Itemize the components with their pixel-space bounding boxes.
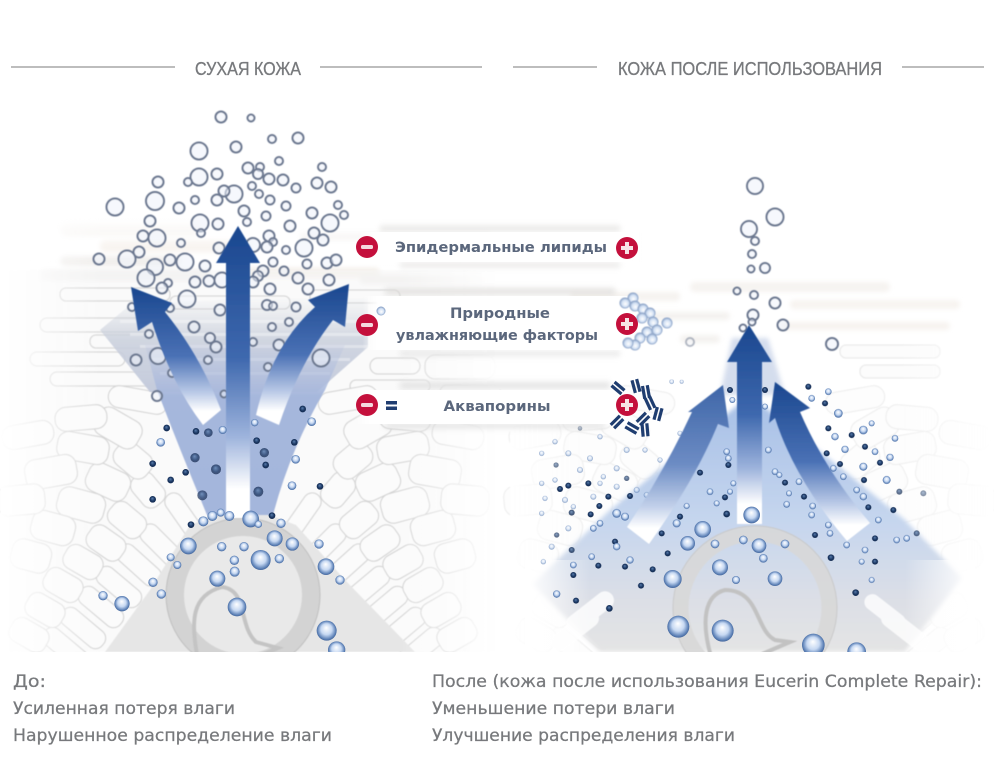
label: aquaporins: Аквапорины bbox=[444, 399, 550, 415]
caption: before: До: bbox=[13, 672, 46, 692]
follicle: dry skin bbox=[166, 518, 320, 672]
icon: bubble cluster bbox=[620, 292, 672, 350]
caption: before: Нарушенное распределение влаги bbox=[13, 726, 332, 746]
caption: before bbox=[13, 672, 332, 746]
icon: single bubble bbox=[376, 306, 386, 316]
icon: aquaporin cluster bbox=[610, 379, 664, 437]
rising bubbles: after use bbox=[686, 178, 838, 350]
blue fan bbox=[532, 395, 962, 652]
funnel: dry skin bbox=[145, 345, 345, 515]
caption: after: Улучшение распределения влаги bbox=[432, 726, 735, 746]
heading: dry skin: СУХАЯ КОЖА bbox=[195, 59, 301, 79]
label: epidermal lipids bbox=[356, 232, 642, 262]
white cell ends bbox=[547, 588, 933, 654]
caption: after: После (кожа после использования Eucerin Complete Repair): bbox=[432, 672, 982, 692]
label band shadows bbox=[380, 226, 620, 428]
arrows: after use bbox=[627, 325, 870, 544]
plus badge bbox=[616, 237, 638, 259]
caption: after: Уменьшение потери влаги bbox=[432, 699, 675, 719]
scattered moisture: after use bbox=[539, 379, 926, 612]
arrows: dry skin bbox=[131, 226, 349, 518]
follicle: after use bbox=[673, 526, 837, 690]
skin background: after use bbox=[503, 282, 994, 672]
plus badge bbox=[616, 313, 638, 335]
minus badge bbox=[356, 236, 378, 258]
label: natural moisturizing factors: увлажняющие факторы bbox=[396, 328, 598, 344]
large droplets: after use bbox=[664, 387, 866, 661]
skin background: dry skin bbox=[0, 200, 500, 672]
label: epidermal lipids: Эпидермальные липиды bbox=[395, 240, 607, 256]
label: aquaporins bbox=[355, 379, 664, 437]
caption: after bbox=[432, 672, 982, 746]
label: natural moisturizing factors: Природные bbox=[450, 306, 550, 322]
bubbles escaping: dry skin bbox=[94, 112, 348, 401]
heading: skin after use: КОЖА ПОСЛЕ ИСПОЛЬЗОВАНИЯ bbox=[618, 59, 882, 79]
grey band bbox=[100, 298, 368, 392]
caption: before: Усиленная потеря влаги bbox=[13, 699, 235, 719]
arrow halo bbox=[720, 338, 785, 395]
minus badge bbox=[356, 314, 378, 336]
icon: equals bars bbox=[386, 401, 397, 410]
label: natural moisturizing factors bbox=[356, 292, 672, 350]
moisture droplets: dry skin bbox=[98, 406, 345, 659]
plus badge bbox=[616, 394, 638, 416]
bottom clean edge bbox=[0, 652, 994, 774]
minus badge bbox=[356, 394, 378, 416]
grey fan bbox=[105, 505, 415, 652]
